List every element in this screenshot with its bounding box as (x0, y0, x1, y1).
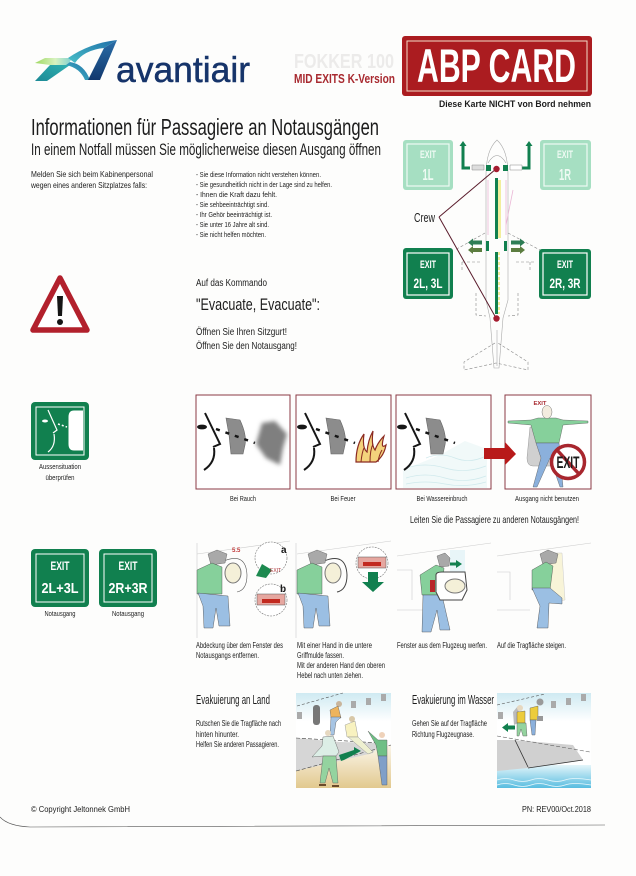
step captions: Auf die Tragfläche steigen. (497, 641, 566, 650)
step captions: Griffmulde fassen. (297, 651, 344, 660)
exit sign 1L (403, 140, 453, 190)
captions: exit signs: Notausgang (112, 609, 144, 618)
aircraft type label (294, 51, 395, 86)
exit sign 2L 3L: 2L, 3L (414, 275, 443, 291)
arrow: redirect (484, 442, 516, 465)
intro text: Melden Sie sich beim Kabinenpersonal (31, 169, 153, 179)
exit sign 2R 3R (539, 249, 591, 299)
aisle green (495, 178, 498, 239)
caption: check outside: Aussensituation (39, 462, 81, 471)
row captions: Ausgang nicht benutzen (515, 494, 579, 503)
conditions list (196, 172, 332, 239)
step captions: Notausgangs entfernen. (196, 651, 259, 660)
row captions: Bei Feuer (330, 494, 356, 503)
exit sign 1L: 1L (422, 167, 434, 184)
logo: avantiair (35, 40, 250, 90)
illustration: water evacuation (497, 693, 591, 788)
captions: exit signs (44, 609, 144, 618)
logo: avantiair: avantiair (116, 49, 250, 90)
icon: warning triangle (33, 278, 87, 330)
conditions list: - Sie unter 16 Jahre alt sind. (196, 222, 269, 229)
exit sign 2L+3L: EXIT (50, 559, 70, 573)
command text (196, 278, 320, 352)
command text: "Evacuate, Evacuate": (196, 295, 320, 314)
notice: do not remove card: Diese Karte NICHT von Bord nehmen (439, 99, 591, 109)
water evacuation text: Richtung Flugzeugnase. (412, 730, 474, 739)
panel: step 3 throw window (397, 543, 491, 632)
land evacuation text: Evakuierung an Land (196, 693, 270, 707)
crew pointers (439, 169, 496, 318)
step captions: Abdeckung über dem Fenster des (196, 641, 283, 650)
panel: step 4 step on wing (497, 543, 591, 628)
exit sign 2R+3R (99, 549, 157, 607)
captions: exit signs: Notausgang (44, 609, 76, 618)
conditions list: - Sie gesundheitlich nicht in der Lage sind zu helfen. (196, 182, 332, 189)
exit sign 2L 3L (403, 248, 453, 299)
scanned page edge (0, 817, 605, 827)
exit sign 2L+3L (31, 549, 89, 607)
footer part number: PN: REV00/Oct.2018 (522, 804, 591, 814)
exit sign 2R 3R: 2R, 3R (550, 275, 580, 291)
command text: Auf das Kommando (196, 278, 267, 289)
row captions (230, 494, 579, 503)
panel: step 1 remove cover: b (280, 584, 286, 595)
panel: smoke (196, 395, 290, 489)
panel: exit not usable: EXIT (534, 401, 547, 407)
aircraft seat map (439, 140, 540, 370)
command text: Öffnen Sie den Notausgang! (196, 340, 297, 352)
slide guides (488, 180, 513, 235)
ABP card badge (402, 36, 592, 96)
panel: exit not usable: EXIT (556, 453, 580, 472)
conditions list: - Ihnen die Kraft dazu fehlt. (196, 192, 277, 199)
crew label: Crew (414, 210, 435, 225)
exit sign 2R+3R: 2R+3R (108, 580, 148, 597)
exit sign 1R (540, 140, 591, 190)
aircraft type label: FOKKER 100 (294, 51, 394, 73)
panel: step 1 remove cover: 5.5 (232, 548, 241, 554)
fuselage outline (486, 140, 508, 368)
land evacuation text: Rutschen Sie die Tragfläche nach (196, 719, 281, 728)
intro text: wegen eines anderen Sitzplatzes falls: (30, 180, 147, 190)
conditions list: - Sie nicht helfen möchten. (196, 232, 266, 239)
water evacuation text (412, 693, 494, 739)
step captions (196, 641, 566, 680)
conditions list: - Sie diese Information nicht verstehen können. (196, 172, 321, 179)
caption: check outside (39, 462, 81, 482)
exit sign 2L 3L: EXIT (420, 259, 436, 271)
row captions: Bei Rauch (230, 494, 256, 503)
panel: step 1 remove cover: EXIT (270, 568, 281, 574)
intro text (30, 169, 153, 190)
panel: step 1 remove cover: a (281, 545, 287, 556)
conditions list: - Sie sehbeeinträchtigt sind. (196, 202, 269, 209)
caption: check outside: überprüfen (46, 473, 74, 482)
subtitle: In einem Notfall müssen Sie möglicherweise diesen Ausgang öffnen (31, 141, 381, 159)
step captions: Mit einer Hand in die untere (297, 641, 372, 650)
overwing arrows (468, 238, 482, 246)
aircraft type label: MID EXITS K-Version (294, 71, 395, 86)
land evacuation text: hinten hinunter. (196, 730, 239, 739)
row captions: Bei Wassereinbruch (416, 494, 468, 503)
exit sign 1R: EXIT (557, 149, 573, 161)
water evacuation text: Gehen Sie auf der Tragfläche (412, 719, 487, 728)
icon: check outside (31, 402, 89, 460)
door arrows front (463, 146, 470, 168)
panel: step 2 open exit (296, 541, 391, 638)
footer copyright: © Copyright Jeltonnek GmbH (31, 804, 130, 814)
land evacuation text: Helfen Sie anderen Passagieren. (196, 740, 279, 749)
step captions: Hebel nach unten ziehen. (297, 671, 363, 680)
illustration: land evacuation (296, 693, 391, 788)
exit sign 2R 3R: EXIT (557, 259, 573, 271)
title: Informationen für Passagiere an Notausgängen (31, 114, 379, 140)
exit sign 1R: 1R (559, 167, 571, 184)
panel: step 1 remove cover (197, 541, 290, 638)
water evacuation text: Evakuierung im Wasser (412, 693, 494, 707)
land evacuation text (196, 693, 281, 749)
panel: exit not usable (505, 395, 591, 489)
exit sign 1L: EXIT (420, 149, 436, 161)
step captions: Mit der anderen Hand den oberen (297, 661, 385, 670)
step captions: Fenster aus dem Flugzeug werfen. (397, 641, 487, 650)
wings and tail (455, 233, 540, 272)
panel: fire (296, 395, 391, 489)
conditions list: - Ihr Gehör beeinträchtigt ist. (196, 212, 272, 219)
exit sign 2L+3L: 2L+3L (42, 580, 78, 597)
panel: water (396, 395, 491, 489)
exit sign 2R+3R: EXIT (118, 559, 138, 573)
command text: Öffnen Sie Ihren Sitzgurt! (196, 326, 287, 338)
